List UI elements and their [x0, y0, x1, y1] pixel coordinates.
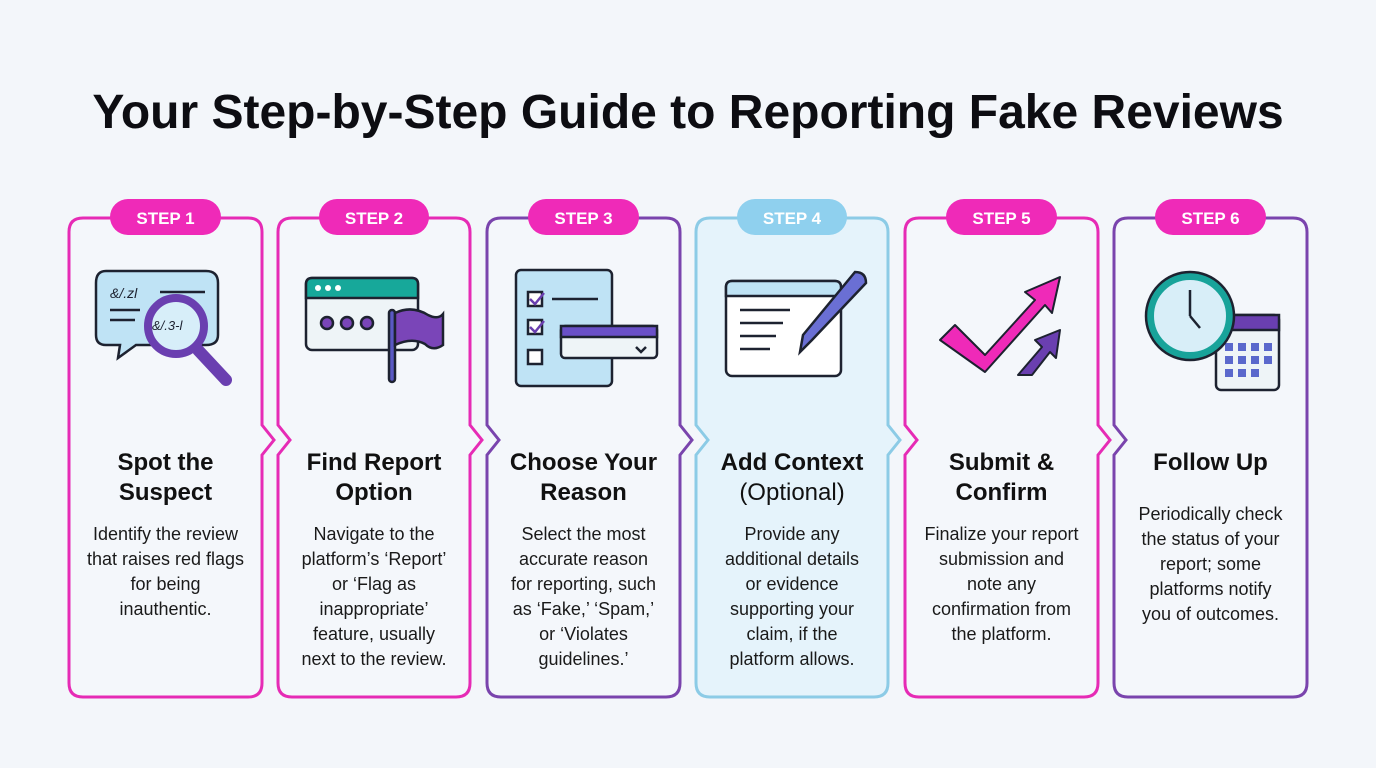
badge: step 3: STEP 3: [554, 209, 613, 228]
icon: check with arrows: [940, 277, 1060, 375]
text: step 3: or ‘Violates: [539, 624, 628, 644]
text: step 3: as ‘Fake,’ ‘Spam,’: [513, 599, 654, 619]
badge: step 1: STEP 1: [136, 209, 195, 228]
panel: step 3: [487, 199, 692, 697]
text: step 4: claim, if the: [746, 624, 838, 644]
badge: step 4: [737, 199, 847, 235]
heading: step 3: Choose Your: [510, 449, 657, 476]
panel: step 1: [69, 199, 274, 697]
text: step 3: accurate reason: [519, 549, 648, 569]
heading: step 3: Reason: [540, 479, 627, 506]
panel: step 4: [696, 199, 900, 697]
badge: step 2: STEP 2: [345, 209, 403, 228]
icon: checklist with dropdown: [516, 270, 657, 386]
icon: document with pen: [726, 272, 866, 376]
icon: clock and calendar: [1146, 272, 1279, 390]
text: step 6: platforms notify: [1149, 579, 1272, 599]
heading: step 4: Add Context: [721, 449, 863, 476]
text: step 3: guidelines.’: [538, 649, 629, 669]
badge: step 2: [319, 199, 429, 235]
text: step 4: supporting your: [730, 599, 854, 619]
icon: speech bubble with magnifier: [96, 271, 226, 380]
badge: step 4: STEP 4: [763, 209, 822, 228]
heading: step 4: (Optional): [739, 479, 845, 506]
text: step 6: the status of your: [1141, 529, 1280, 549]
text: step 3: for reporting, such: [511, 574, 656, 594]
icon: speech bubble with magnifier: &/.3-l: [152, 318, 183, 333]
icon: browser with flag: [306, 278, 443, 382]
badge: step 6: [1155, 199, 1266, 235]
heading: step 2: Find Report: [307, 449, 441, 476]
text: step 5: Finalize your report: [924, 524, 1079, 544]
text: step 1: that raises red flags: [87, 549, 244, 569]
text: step 5: confirmation from: [932, 599, 1071, 619]
text: step 1: Identify the review: [93, 524, 239, 544]
badge: step 1: [110, 199, 221, 235]
heading: step 5: Submit &: [949, 449, 1054, 476]
text: step 1: inauthentic.: [119, 599, 212, 619]
badge: step 3: [528, 199, 639, 235]
text: step 4: additional details: [725, 549, 859, 569]
text: step 2: Navigate to the: [313, 524, 435, 544]
panel: step 5: [905, 199, 1110, 697]
heading: step 5: Confirm: [956, 479, 1048, 506]
badge: step 6: STEP 6: [1181, 209, 1240, 228]
heading: step 1: Suspect: [119, 479, 212, 506]
text: step 6: report; some: [1160, 554, 1261, 574]
text: step 4: or evidence: [745, 574, 839, 594]
heading: step 6: Follow Up: [1153, 449, 1268, 476]
text: step 4: Provide any: [744, 524, 840, 544]
text: step 6: you of outcomes.: [1142, 604, 1279, 624]
text: step 5: the platform.: [951, 624, 1052, 644]
panel: step 6: [1114, 199, 1307, 697]
panel: step 2: [278, 199, 482, 697]
text: step 2: feature, usually: [313, 624, 435, 644]
text: step 2: next to the review.: [301, 649, 447, 669]
text: step 5: submission and: [939, 549, 1064, 569]
text: step 3: Select the most: [521, 524, 646, 544]
icon: speech bubble with magnifier: &/.zl: [110, 285, 138, 301]
text: step 2: inappropriate’: [319, 599, 429, 619]
text: step 2: or ‘Flag as: [332, 574, 416, 594]
badge: step 5: STEP 5: [972, 209, 1031, 228]
text: step 2: platform’s ‘Report’: [302, 549, 446, 569]
text: step 5: note any: [967, 574, 1036, 594]
text: step 1: for being: [130, 574, 201, 594]
heading: step 2: Option: [335, 479, 413, 506]
heading: step 1: Spot the: [118, 449, 214, 476]
text: step 4: platform allows.: [729, 649, 855, 669]
title: Your Step-by-Step Guide to Reporting Fake Reviews: [92, 86, 1284, 139]
badge: step 5: [946, 199, 1057, 235]
text: step 6: Periodically check: [1138, 504, 1284, 524]
